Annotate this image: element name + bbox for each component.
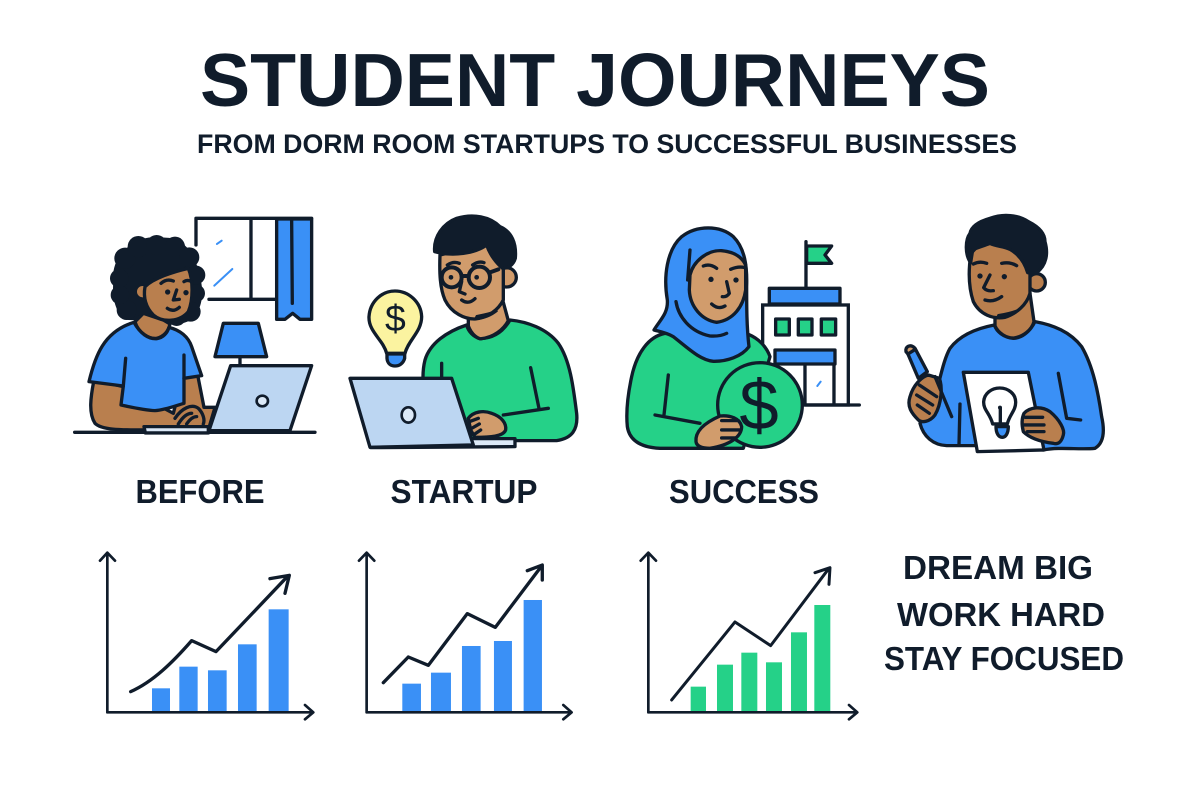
arms	[91, 373, 215, 430]
building	[763, 242, 859, 405]
left hand	[909, 375, 941, 422]
coin: $	[739, 365, 779, 444]
chart: startup growth	[359, 553, 572, 719]
illustration: founder with idea bulb	[350, 216, 577, 448]
ear	[1028, 274, 1045, 291]
facial features	[676, 250, 745, 336]
bars	[152, 609, 289, 712]
right hand	[1022, 408, 1064, 444]
face	[440, 243, 503, 319]
axes	[100, 553, 313, 719]
hair	[966, 215, 1047, 273]
label: startup: STARTUP	[390, 473, 538, 510]
chart: before growth	[100, 553, 313, 719]
face	[969, 240, 1030, 318]
hair	[435, 216, 516, 268]
curly hair	[110, 235, 205, 326]
glasses and features	[442, 262, 498, 319]
laptop	[144, 366, 312, 433]
shirt fold lines	[123, 355, 184, 386]
neck	[468, 300, 508, 339]
face and neck	[135, 268, 192, 338]
label: success: SUCCESS	[669, 473, 819, 510]
lamp	[215, 323, 267, 367]
label: before: BEFORE	[136, 473, 264, 510]
blue sweater	[920, 322, 1103, 450]
green sweater	[423, 320, 577, 441]
neck	[995, 293, 1034, 338]
subtitle: FROM DORM ROOM STARTUPS TO SUCCESSFUL BUSINESSES	[197, 129, 1017, 159]
sweater folds	[655, 375, 700, 423]
title: STUDENT JOURNEYS	[200, 38, 990, 122]
chart: success growth	[641, 553, 857, 719]
hijab	[654, 228, 749, 361]
illustration: student sketching an idea	[906, 215, 1103, 452]
green sweater	[627, 333, 770, 448]
sweater folds	[959, 373, 1081, 445]
hand	[468, 412, 506, 437]
sweater folds	[442, 363, 548, 415]
facial features	[973, 262, 1020, 318]
trend arrow	[131, 575, 289, 692]
trend arrow	[672, 568, 830, 700]
icon: idea bulb with dollar: $	[385, 297, 406, 339]
hand	[175, 406, 204, 424]
motto text: STAY FOCUSED	[884, 640, 1124, 677]
illustration: student at laptop in dorm room	[75, 218, 315, 433]
bars	[402, 600, 542, 712]
bars	[691, 605, 830, 712]
axes	[359, 553, 572, 719]
laptop	[350, 378, 515, 448]
face	[689, 251, 746, 322]
trend arrow	[383, 565, 542, 683]
motto text: WORK HARD	[897, 596, 1105, 633]
paper with bulb sketch	[963, 372, 1044, 452]
illustration: successful entrepreneur with coin and building	[627, 228, 859, 448]
window with curtain	[196, 218, 312, 319]
blue t-shirt	[89, 322, 202, 411]
hand	[696, 416, 742, 448]
ear	[497, 268, 516, 287]
axes	[641, 553, 857, 719]
coin	[718, 363, 802, 447]
motto text: DREAM BIG	[903, 549, 1093, 586]
desk line	[75, 427, 315, 437]
motto text	[884, 549, 1124, 677]
icon: idea bulb with dollar	[369, 291, 422, 366]
pencil	[906, 346, 927, 378]
